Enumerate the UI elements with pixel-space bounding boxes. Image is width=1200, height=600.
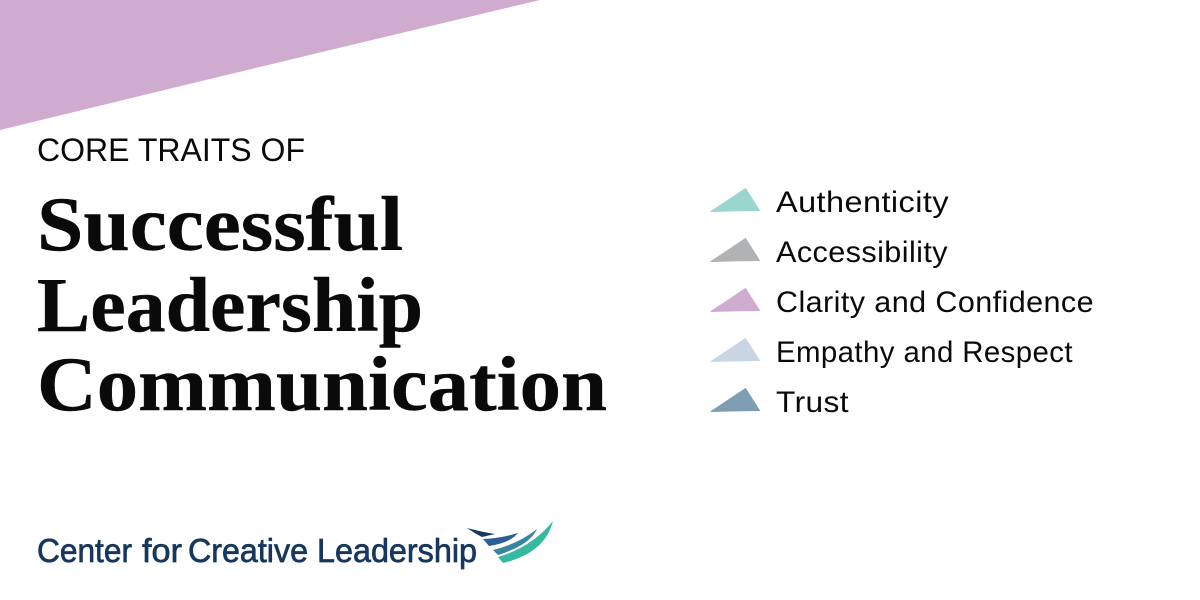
logo wordmark: Leadership: [317, 532, 477, 569]
corner shape: lilac: [0, 0, 540, 130]
main title: [37, 181, 607, 427]
legend item: Trust: [711, 386, 849, 419]
main title: Successful: [37, 181, 403, 267]
legend: [711, 186, 1094, 419]
logo: Center for Creative Leadership: [37, 521, 553, 569]
legend item: Clarity and Confidence: Clarity and Confidence: [776, 286, 1094, 319]
legend item: Accessibility: [711, 236, 948, 269]
main title: Communication: [37, 341, 607, 427]
main title: Leadership: [37, 262, 423, 348]
logo wordmark: Center: [37, 532, 132, 569]
legend item: Authenticity: Authenticity: [776, 186, 949, 219]
logo wordmark: Creative: [188, 532, 308, 569]
logo mark: swoosh: [467, 521, 553, 563]
logo wordmark: for: [142, 532, 182, 569]
eyebrow heading: CORE TRAITS OF: [37, 132, 305, 168]
logo wordmark: [37, 532, 477, 569]
legend item: Trust: Trust: [776, 386, 849, 419]
legend item: Empathy and Respect: Empathy and Respect: [776, 336, 1073, 369]
legend item: Accessibility: Accessibility: [776, 236, 948, 269]
legend item: Authenticity: [711, 186, 949, 219]
